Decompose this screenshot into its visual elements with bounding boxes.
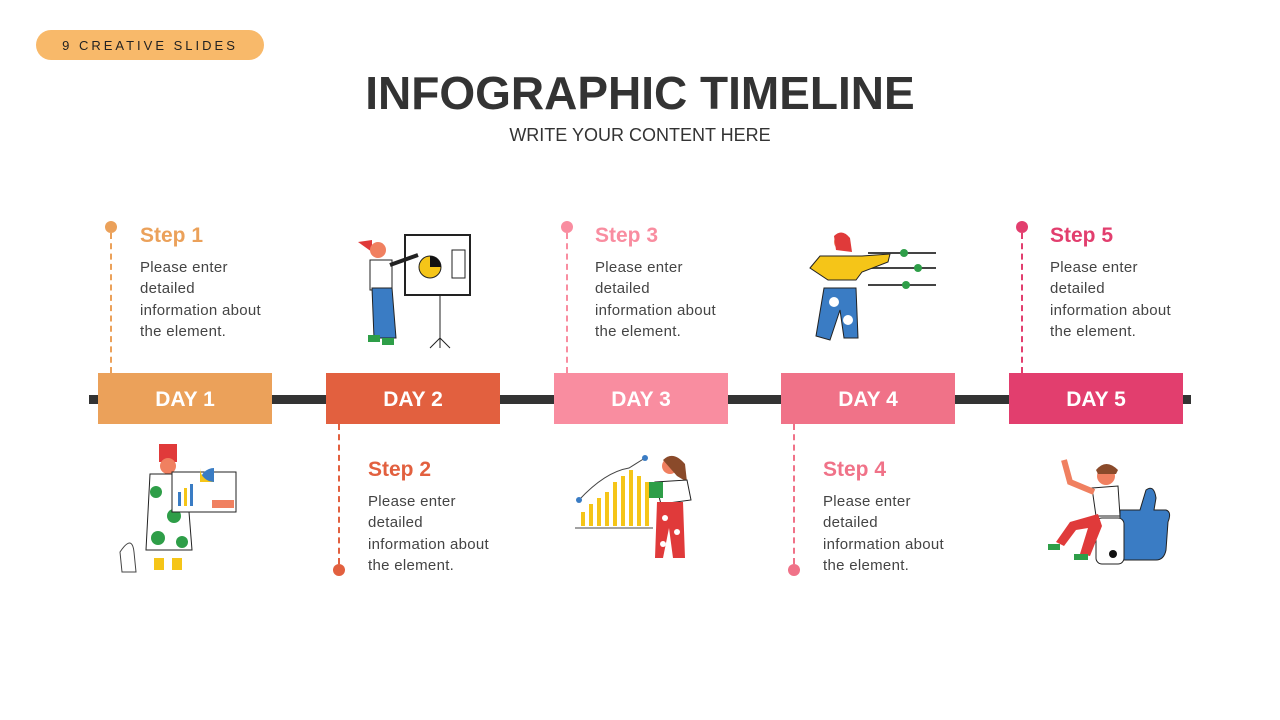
step 4 text: Step 4	[823, 458, 886, 481]
step 4 text: Please enter	[823, 493, 911, 510]
step 4 text: the element.	[823, 557, 909, 574]
step 3 text: the element.	[595, 323, 681, 340]
connector 4	[788, 424, 800, 576]
illustration: presenter	[358, 234, 471, 348]
connector 5	[1016, 221, 1028, 373]
step 2 text: information about	[368, 536, 489, 553]
day 1 box: DAY 1	[155, 388, 215, 411]
day 5 box: DAY 5	[1066, 388, 1126, 411]
step 5 text: Step 5	[1050, 224, 1113, 247]
step 5 text	[1050, 224, 1171, 340]
step 4 text: detailed	[823, 514, 878, 531]
step 1 text: detailed	[140, 280, 195, 297]
step 5 text: information about	[1050, 302, 1171, 319]
day 3 box	[554, 373, 728, 424]
badge	[36, 30, 264, 60]
connector 3	[561, 221, 573, 373]
illustration: woman with chart board	[120, 444, 236, 572]
step 3 text: Step 3	[595, 224, 658, 247]
badge: 9 CREATIVE SLIDES	[62, 38, 238, 53]
step 4 text: information about	[823, 536, 944, 553]
illustration: sliders	[809, 232, 936, 341]
step 1 text: Please enter	[140, 259, 228, 276]
step 3 text: information about	[595, 302, 716, 319]
step 3 text	[595, 224, 716, 340]
step 3 text: detailed	[595, 280, 650, 297]
step 3 text: Please enter	[595, 259, 683, 276]
step 2 text: detailed	[368, 514, 423, 531]
step 5 text: detailed	[1050, 280, 1105, 297]
step 1 text	[140, 224, 261, 340]
day 5 box	[1009, 373, 1183, 424]
illustration: growth chart	[575, 455, 692, 558]
day 1 box	[98, 373, 272, 424]
subtitle: WRITE YOUR CONTENT HERE	[509, 125, 771, 145]
day 4 box	[781, 373, 955, 424]
step 5 text: Please enter	[1050, 259, 1138, 276]
step 1 text: the element.	[140, 323, 226, 340]
step 1 text: information about	[140, 302, 261, 319]
illustration: thumbs up	[1048, 459, 1170, 564]
step 2 text: Please enter	[368, 493, 456, 510]
connector 2	[333, 424, 345, 576]
step 2 text: Step 2	[368, 458, 431, 481]
step 1 text: Step 1	[140, 224, 203, 247]
title: INFOGRAPHIC TIMELINE	[365, 67, 915, 119]
timeline bar	[89, 395, 1191, 404]
day 2 box: DAY 2	[383, 388, 443, 411]
step 4 text	[823, 458, 944, 574]
day 2 box	[326, 373, 500, 424]
day 4 box: DAY 4	[838, 388, 898, 411]
connector 1	[105, 221, 117, 373]
step 2 text: the element.	[368, 557, 454, 574]
step 2 text	[368, 458, 489, 574]
day 3 box: DAY 3	[611, 388, 671, 411]
step 5 text: the element.	[1050, 323, 1136, 340]
